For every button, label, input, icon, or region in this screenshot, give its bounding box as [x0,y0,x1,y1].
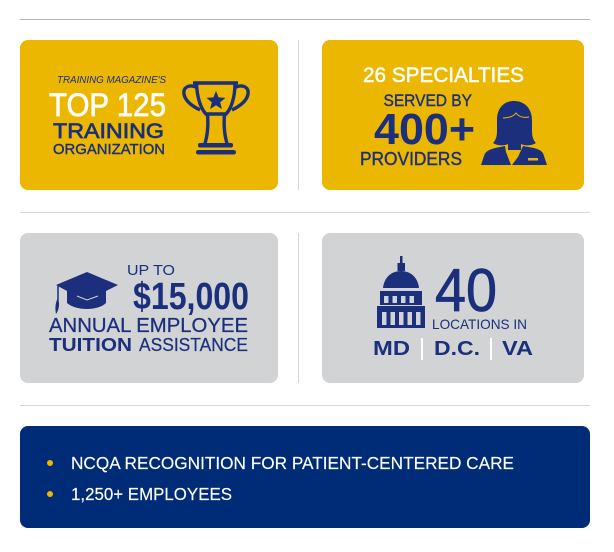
text: Training: TRAINING [53,120,164,143]
panel: recognition and employees [20,426,590,528]
text: served by: SERVED BY [384,91,472,110]
icon: woman provider [481,101,547,165]
icon: graduation cap [55,272,118,314]
text: 400+: 400+ [374,105,475,154]
text: NCQA recognition: NCQA RECOGNITION FOR PATIENT-CENTERED CARE [71,453,514,473]
panel: tuition assistance [20,233,278,383]
panel: locations [322,233,584,383]
text: annual employee: ANNUAL EMPLOYEE [49,315,248,337]
text: up to: UP TO [127,262,175,279]
text: 40: 40 [435,257,497,324]
text: assistance: ASSISTANCE [139,335,248,355]
text: locations in: LOCATIONS IN [432,316,527,332]
bullet [47,460,53,466]
text: Top 125: TOP 125 [49,87,166,123]
text: $15,000: $15,000 [133,276,249,318]
panel: top 125 training organization [20,40,278,190]
text: MD: MD [373,338,410,360]
text: providers: PROVIDERS [360,149,462,169]
text: employees: 1,250+ EMPLOYEES [71,484,232,504]
bullet [47,491,53,497]
icon: capitol building [377,256,425,328]
text: tuition: TUITION [49,335,132,355]
text: D.C.: D.C. [434,338,480,360]
text: VA: VA [502,338,533,360]
text: Organization: ORGANIZATION [53,142,165,158]
text: 26 specialties: 26 SPECIALTIES [363,64,524,87]
panel: specialties and providers [322,40,584,190]
icon: trophy [184,83,248,154]
text: Training Magazine's: TRAINING MAGAZINE'S [57,74,166,86]
